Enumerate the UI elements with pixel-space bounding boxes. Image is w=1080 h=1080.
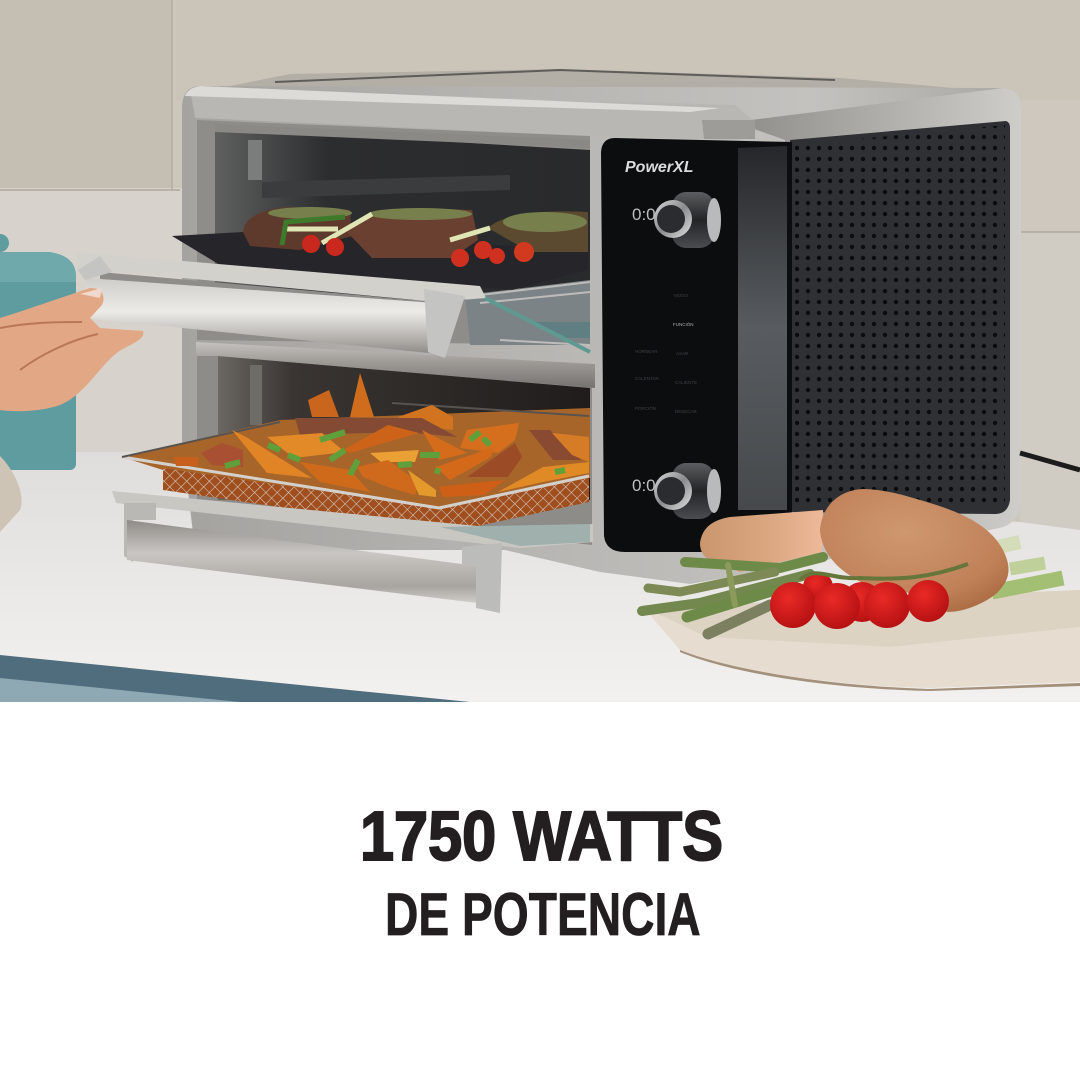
right end cap: [462, 543, 502, 613]
asparagus: [642, 557, 823, 634]
left support: [124, 503, 156, 562]
oven top: [225, 69, 1010, 100]
digital display: upper: 0:0: [632, 205, 656, 224]
side steel frame: [735, 88, 1021, 540]
cherry tomatoes: [302, 235, 320, 253]
towel: [0, 456, 22, 532]
steak 1: [243, 207, 352, 250]
steak 3: [488, 211, 588, 252]
power cord: [1020, 453, 1080, 470]
control labels: HORNEAR: [635, 349, 658, 354]
front top strip: [190, 88, 755, 140]
upper rack: [465, 280, 590, 345]
countertop: [0, 452, 1080, 702]
wall background: [0, 0, 1080, 540]
handle: [127, 520, 477, 603]
control labels: MODO: [674, 293, 688, 298]
knob: upper: [654, 192, 721, 248]
control labels: CALIENTE: [675, 380, 697, 385]
counter front edge and cabinet: [0, 655, 470, 702]
subheading: power: DE POTENCIA: [385, 882, 701, 948]
green onions: [225, 432, 565, 475]
upper oven cavity: [197, 120, 590, 345]
air fry basket: [122, 408, 590, 510]
knob: lower: [654, 463, 721, 519]
steak 2: [347, 208, 478, 258]
side mesh panel: [790, 121, 1010, 514]
teal canister: [0, 234, 76, 470]
panel: kitchen photograph: [0, 0, 1080, 702]
scallions: [992, 578, 1063, 592]
lower tray with sweet potato fries: [122, 373, 590, 532]
control panel: [601, 138, 792, 552]
hand: [0, 288, 143, 411]
control labels: CALENTAR: [635, 376, 659, 381]
lower oven cavity: [197, 345, 592, 545]
right end cap: [424, 289, 465, 358]
fries: [174, 373, 589, 497]
door top bar: [76, 252, 486, 302]
control labels: ASAR: [676, 351, 689, 356]
control labels: PORCIÓN: [635, 405, 656, 411]
control labels: [635, 293, 698, 414]
potatoes: [700, 489, 1009, 612]
herb crust: [268, 207, 352, 219]
oven: [182, 69, 1021, 584]
digital display: lower: 0:0: [632, 476, 656, 495]
cutting board: [643, 590, 1080, 691]
upper door with handle: [76, 252, 590, 358]
glossy reflection: [738, 146, 787, 510]
lower door with handle: [112, 491, 593, 613]
cherry tomatoes: [770, 564, 968, 629]
oven body frame: [182, 86, 1021, 584]
left end cap: [78, 256, 112, 280]
control labels: FUNCIÓN: [673, 321, 694, 327]
brand logo: PowerXL: [625, 159, 693, 176]
middle steel bar: [196, 342, 595, 388]
glass door edge: [485, 298, 590, 352]
scallions: [285, 214, 490, 243]
upper tray with steaks: [172, 207, 588, 290]
handle: [84, 278, 436, 353]
door top bar: [112, 491, 593, 548]
white lower section: [0, 702, 1080, 1080]
control labels: DESECAR: [675, 409, 698, 414]
heading: wattage: 1750 WATTS: [360, 796, 723, 875]
